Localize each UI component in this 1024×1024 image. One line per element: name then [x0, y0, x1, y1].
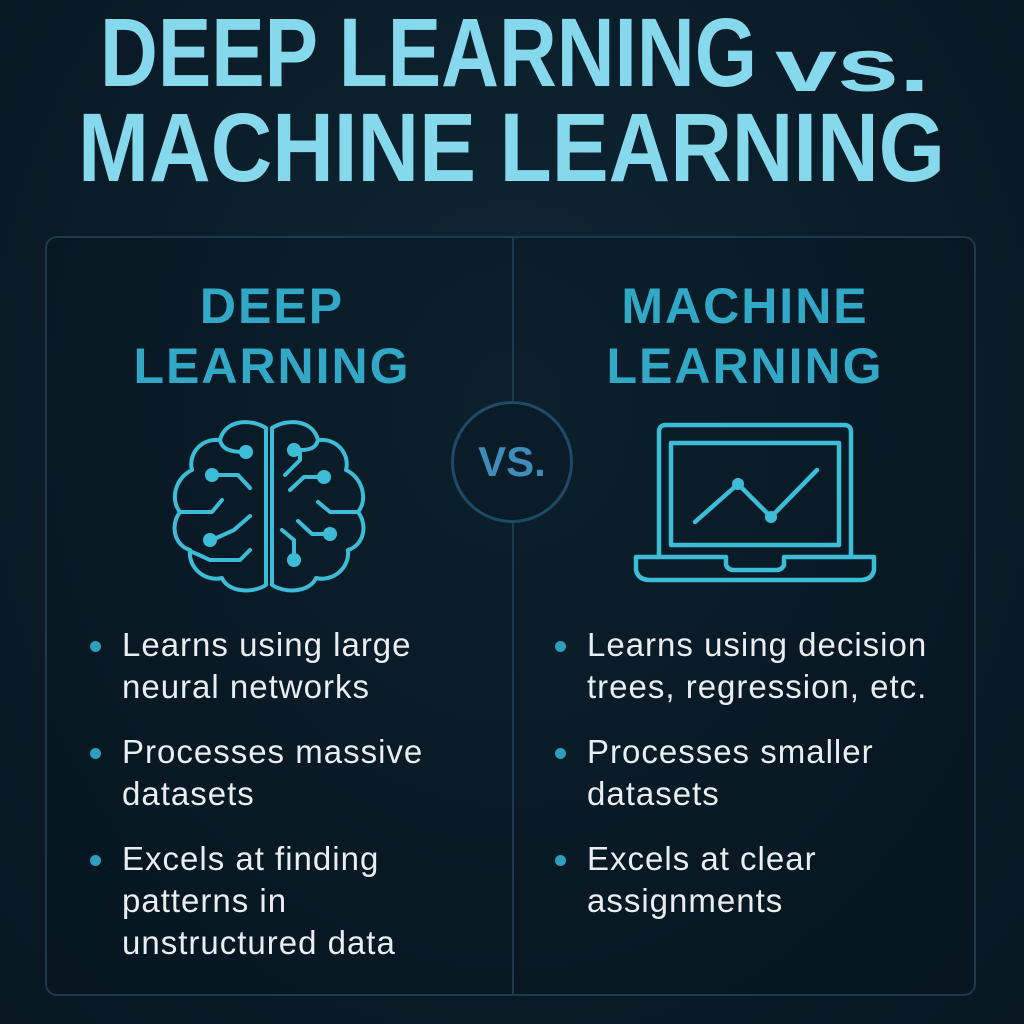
bullets: machine learning: [555, 626, 927, 919]
bullets: deep learning: [90, 626, 423, 961]
heading: deep learning: DEEP: [200, 278, 344, 334]
vs circle: [451, 401, 573, 523]
heading: machine learning: [606, 278, 884, 394]
heading: machine learning: LEARNING: [606, 338, 884, 394]
bullets: deep learning: Excels at finding: [122, 840, 379, 877]
bullets: deep learning: Processes massive: [122, 733, 423, 770]
bullets: deep learning: patterns in: [122, 882, 287, 919]
heading: machine learning: MACHINE: [621, 278, 869, 334]
bullets: machine learning: Processes smaller: [587, 733, 874, 770]
heading: deep learning: LEARNING: [133, 338, 411, 394]
bullets: deep learning: neural networks: [122, 668, 370, 705]
bullets: machine learning: trees, regression, etc.: [587, 668, 927, 705]
bullets: machine learning: Learns using decision: [587, 626, 927, 663]
title: DEEP LEARNING: [100, 0, 757, 107]
title: [78, 0, 945, 200]
bullets: deep learning: unstructured data: [122, 924, 396, 961]
bullets: deep learning: Learns using large: [122, 626, 412, 663]
title: vs.: [775, 24, 930, 107]
vs circle: VS.: [478, 438, 546, 485]
bullets: deep learning: datasets: [122, 775, 255, 812]
bullets: machine learning: assignments: [587, 882, 783, 919]
bullets: machine learning: datasets: [587, 775, 720, 812]
bullets: machine learning: Excels at clear: [587, 840, 817, 877]
panel: comparison: [45, 236, 976, 996]
heading: deep learning: [133, 278, 411, 394]
